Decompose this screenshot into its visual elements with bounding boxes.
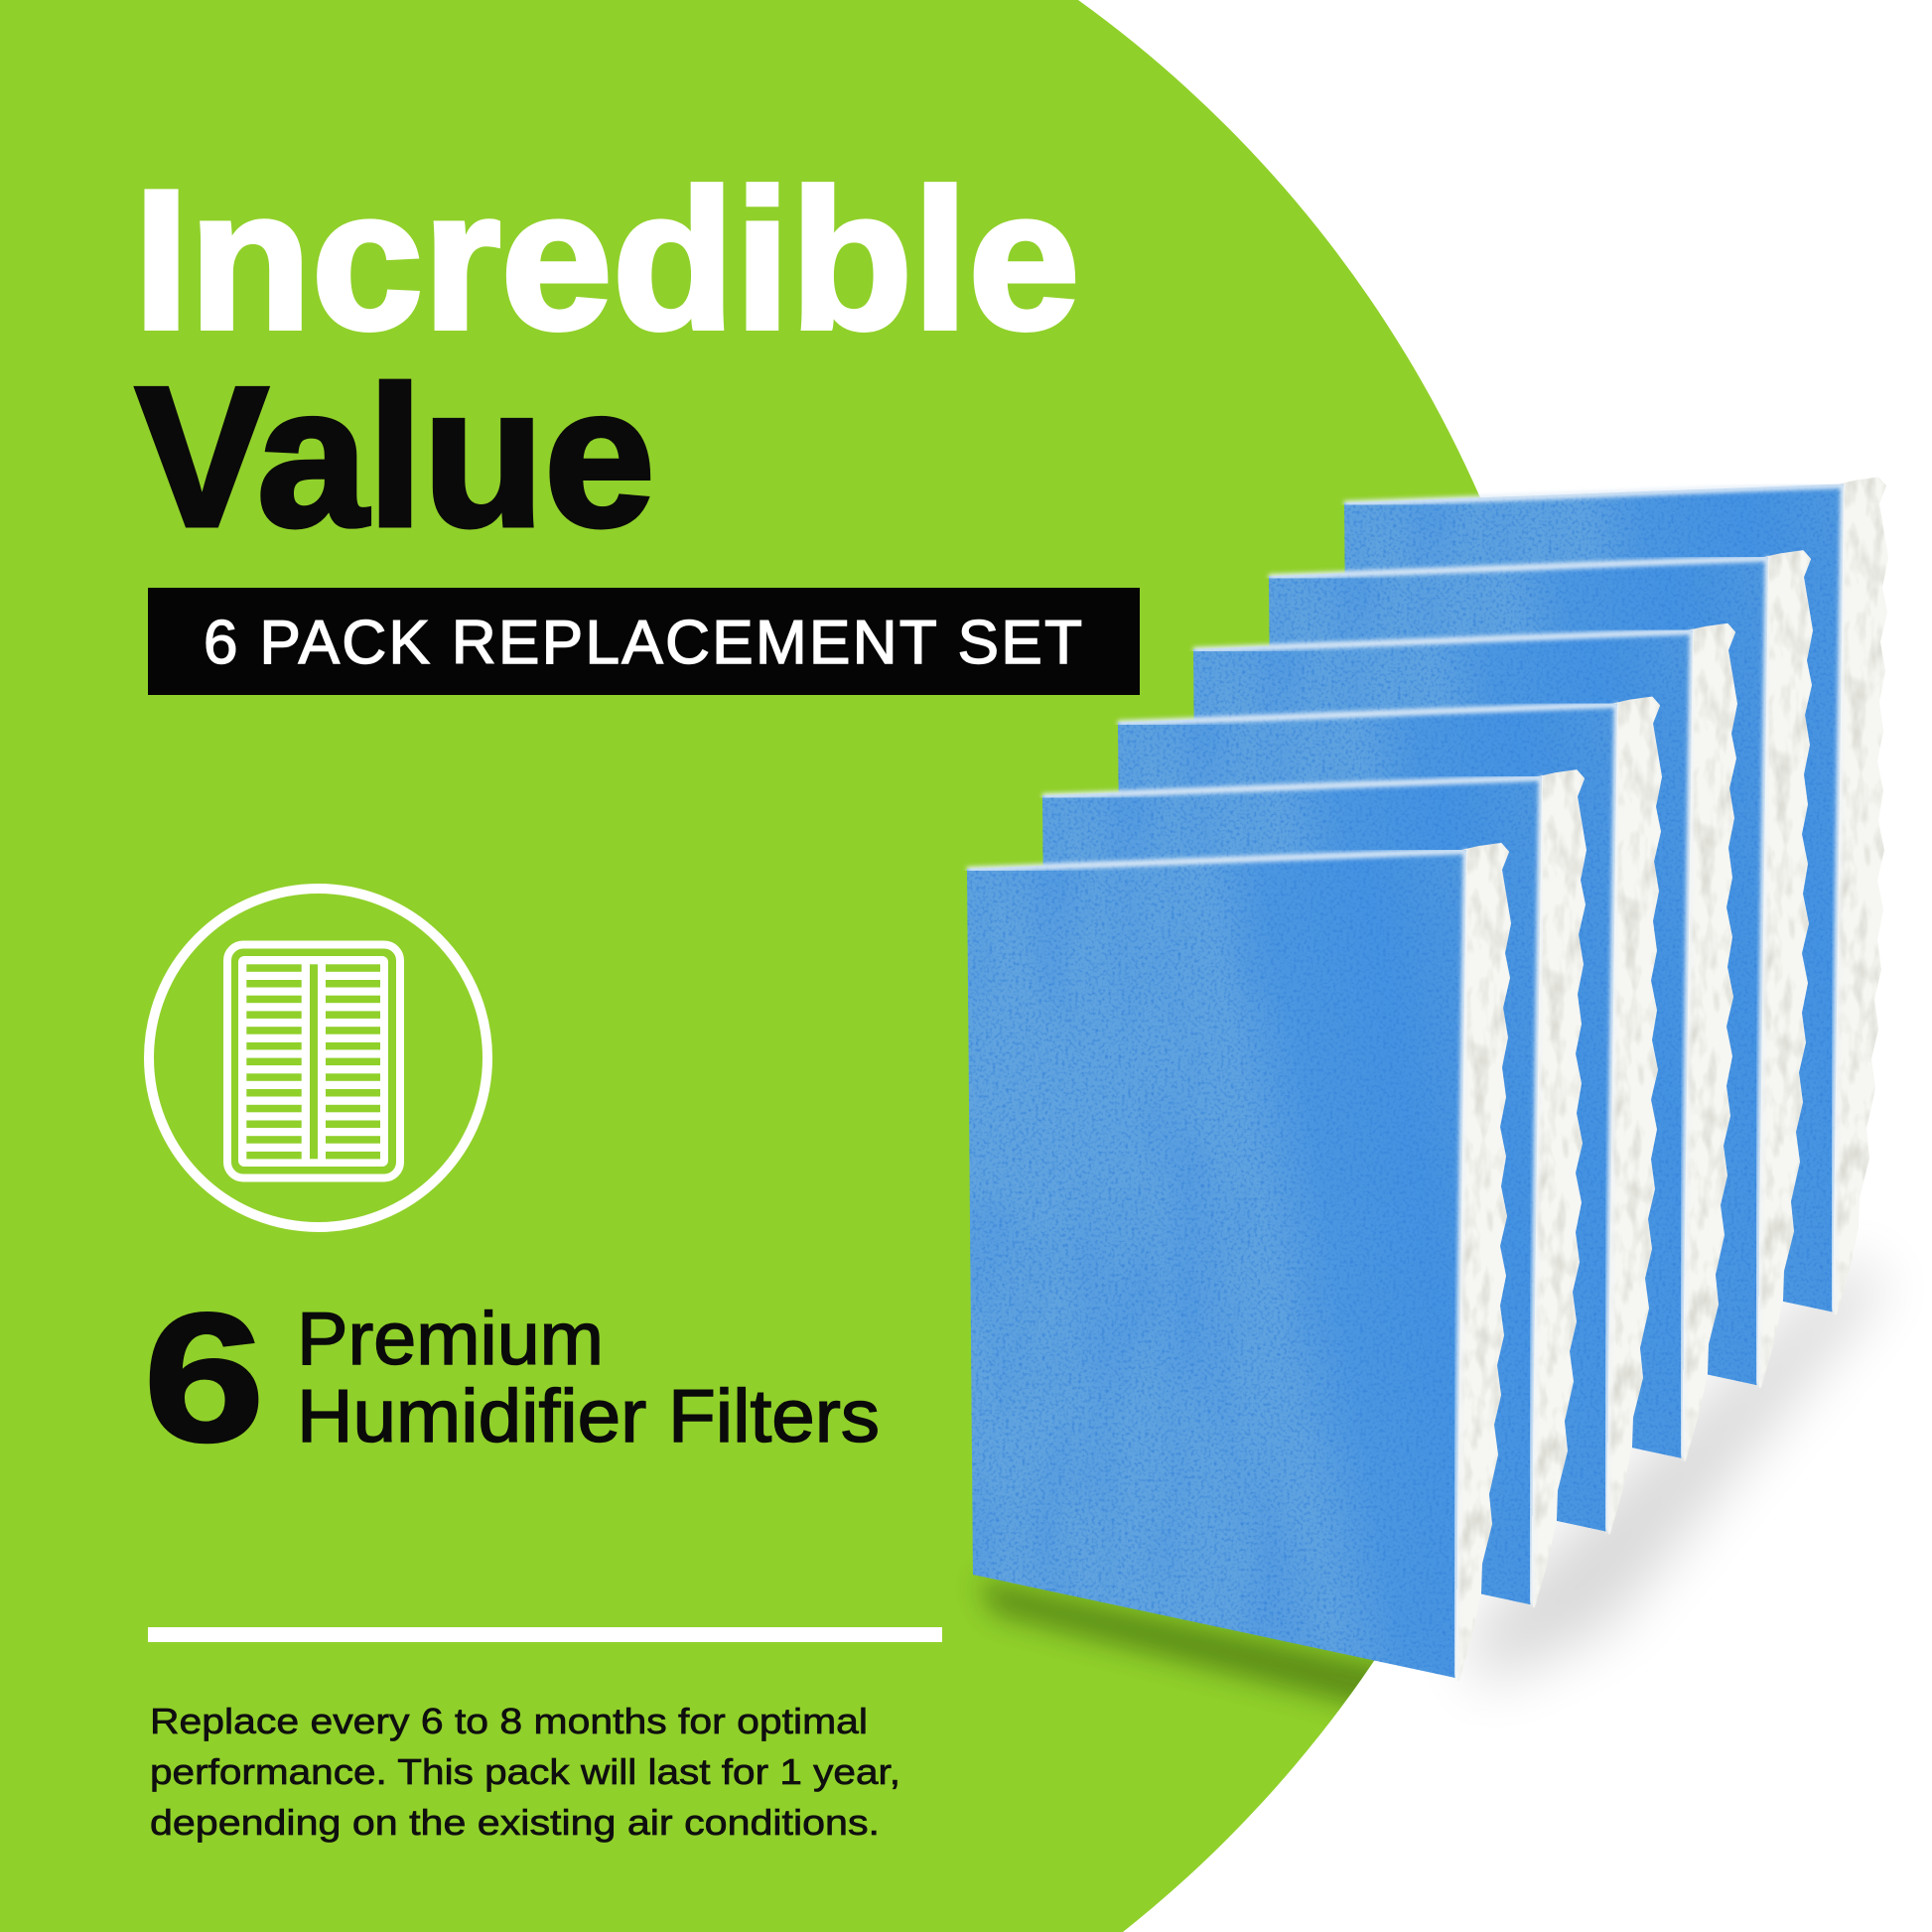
filter 2 [1042, 770, 1586, 1606]
filter 6 (back) [1344, 479, 1887, 1314]
badge: 6 pack replacement set: 6 PACK REPLACEMENT SET [204, 609, 1082, 677]
title: Value: Value [135, 346, 655, 568]
note text: depending on the existing air conditions. [150, 1802, 880, 1843]
stat number: 6: 6 [143, 1275, 264, 1479]
filter 3 [1118, 698, 1661, 1534]
note text: performance. This pack will last for 1 year, [150, 1751, 900, 1792]
filter 4 [1193, 624, 1736, 1460]
filter 5 [1269, 551, 1812, 1387]
stat label: Premium Humidifier Filters [297, 1297, 880, 1457]
icon: humidifier filter in circle [149, 889, 487, 1227]
title: Incredible: Incredible [133, 149, 1080, 371]
filter 1 (front) [967, 844, 1510, 1680]
note text [150, 1701, 900, 1843]
stat label: Premium Humidifier Filters: Humidifier Filters [297, 1374, 880, 1457]
shadow under filters [978, 1261, 1886, 1710]
stat label: Premium Humidifier Filters: Premium [297, 1297, 604, 1380]
note text: Replace every 6 to 8 months for optimal [150, 1701, 868, 1741]
badge: 6 pack replacement set [148, 588, 1140, 695]
divider [148, 1627, 942, 1642]
